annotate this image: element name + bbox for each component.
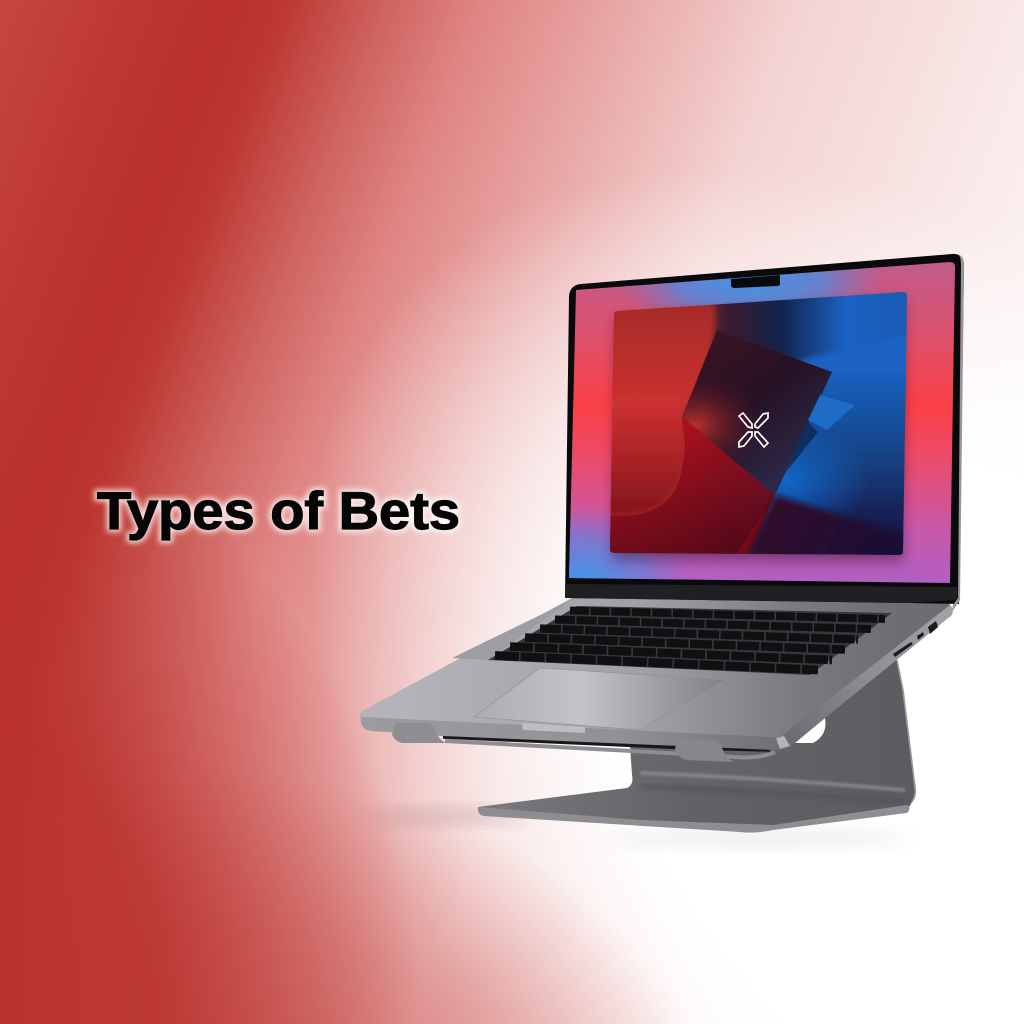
logo icon [739,413,768,447]
stand base edge [478,805,910,833]
laptop base [360,598,953,762]
deck surface [360,598,951,737]
bright blue near crease [731,434,862,528]
right clip [675,738,733,762]
ports [893,621,938,657]
hinge band [565,584,957,603]
window shadow [612,299,905,562]
inner laptop flap [808,395,855,430]
stand highlight [640,773,905,790]
screen [560,255,960,590]
title: Types of Bets: Types of Bets [97,482,460,541]
stand right edge [897,660,915,806]
corner highlight [776,736,790,749]
stand shade [640,786,905,802]
crease streak [735,495,775,556]
under lip [445,741,775,757]
app window artwork [610,292,907,555]
lower right navy [748,495,905,560]
stand cutout [795,718,826,743]
centre fold [682,330,832,495]
left speaker zone [452,599,573,660]
notch [731,275,780,288]
trackpad [474,668,725,730]
title: Types of Bets: Types of Bets [97,482,460,541]
front notch [522,723,585,733]
lid frame [565,254,964,604]
front face [360,714,792,750]
right blue field [794,334,906,555]
ground shadow [370,811,910,843]
left red shape [605,300,715,516]
stand base [478,785,912,828]
keyboard [488,606,892,675]
laptop stand [478,660,915,833]
lid outer edge [952,255,964,612]
left clip [392,723,446,743]
deck side edge [778,605,953,749]
laptop lid [560,254,964,612]
under gap [443,737,770,750]
stand upright [627,660,915,806]
illustration: laptop on stand [360,254,964,843]
lower left red [605,417,775,556]
